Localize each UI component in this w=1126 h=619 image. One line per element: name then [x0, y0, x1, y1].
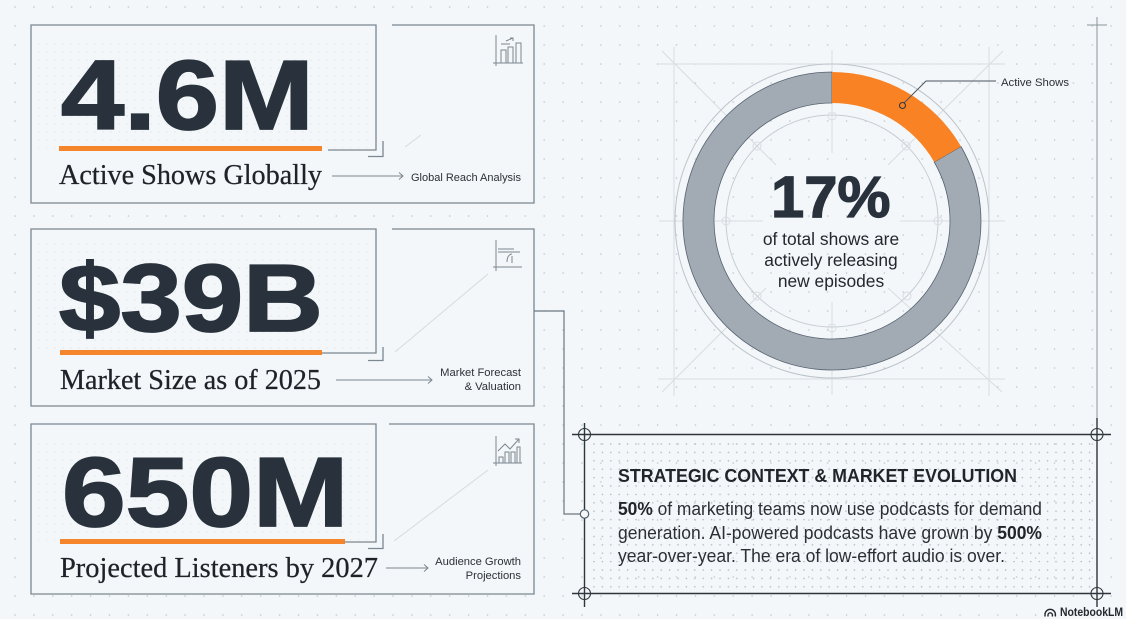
accent bar — [60, 539, 345, 544]
arrow — [336, 376, 432, 384]
panel: strategic context — [572, 418, 1111, 607]
body text: 50% of marketing teams now use podcasts for demand — [618, 499, 1042, 519]
big number: 650M: 650M — [62, 438, 348, 547]
label: market forecast and valuation: & Valuation — [465, 381, 521, 393]
panel: market size stat — [31, 229, 534, 406]
donut centre caption: new episodes — [778, 271, 884, 291]
donut centre caption: of total shows are — [763, 229, 899, 249]
caption: market size: Market Size as of 2025 — [60, 365, 321, 396]
heading: STRATEGIC CONTEXT & MARKET EVOLUTION — [618, 466, 1017, 486]
label: audience growth projections: Audience Growth — [435, 556, 521, 568]
icon: bar chart with arrow — [493, 35, 523, 66]
body text: year-over-year. The era of low-effort audio is over. — [618, 546, 1005, 566]
arrow — [386, 564, 428, 572]
connector from market panel to context panel — [534, 311, 580, 514]
callout: active shows: Active Shows — [1001, 77, 1069, 89]
connector node — [580, 510, 589, 518]
active shows ring segment — [832, 72, 961, 162]
accent bar — [59, 146, 322, 151]
construction grid — [658, 47, 1005, 396]
callout: active shows — [900, 77, 1069, 108]
label: audience growth projections: Projections — [466, 570, 521, 582]
big number: $39B: $39B — [59, 244, 323, 351]
accent bar — [60, 350, 322, 355]
arrow — [332, 172, 403, 180]
icon: growth chart — [493, 436, 522, 466]
right frame line with crosshair — [1087, 17, 1107, 423]
panel: active shows stat — [31, 25, 534, 203]
label: global reach analysis: Global Reach Analysis — [411, 172, 521, 184]
body text: generation. AI-powered podcasts have grown by 500% — [618, 523, 1042, 543]
donut chart — [683, 72, 981, 370]
panel: projected listeners stat — [31, 424, 534, 594]
caption: projected listeners: Projected Listeners by 2027 — [60, 553, 378, 584]
caption: active shows globally: Active Shows Globally — [59, 160, 322, 191]
body text — [618, 499, 1042, 566]
big number: 4.6M: 4.6M — [61, 41, 314, 150]
donut centre caption: actively releasing — [764, 250, 898, 270]
icon: forecast chart — [493, 240, 522, 271]
donut centre percentage: 17% — [771, 166, 891, 230]
remaining share ring — [683, 72, 981, 370]
label: market forecast and valuation: Market Forecast — [440, 367, 522, 379]
